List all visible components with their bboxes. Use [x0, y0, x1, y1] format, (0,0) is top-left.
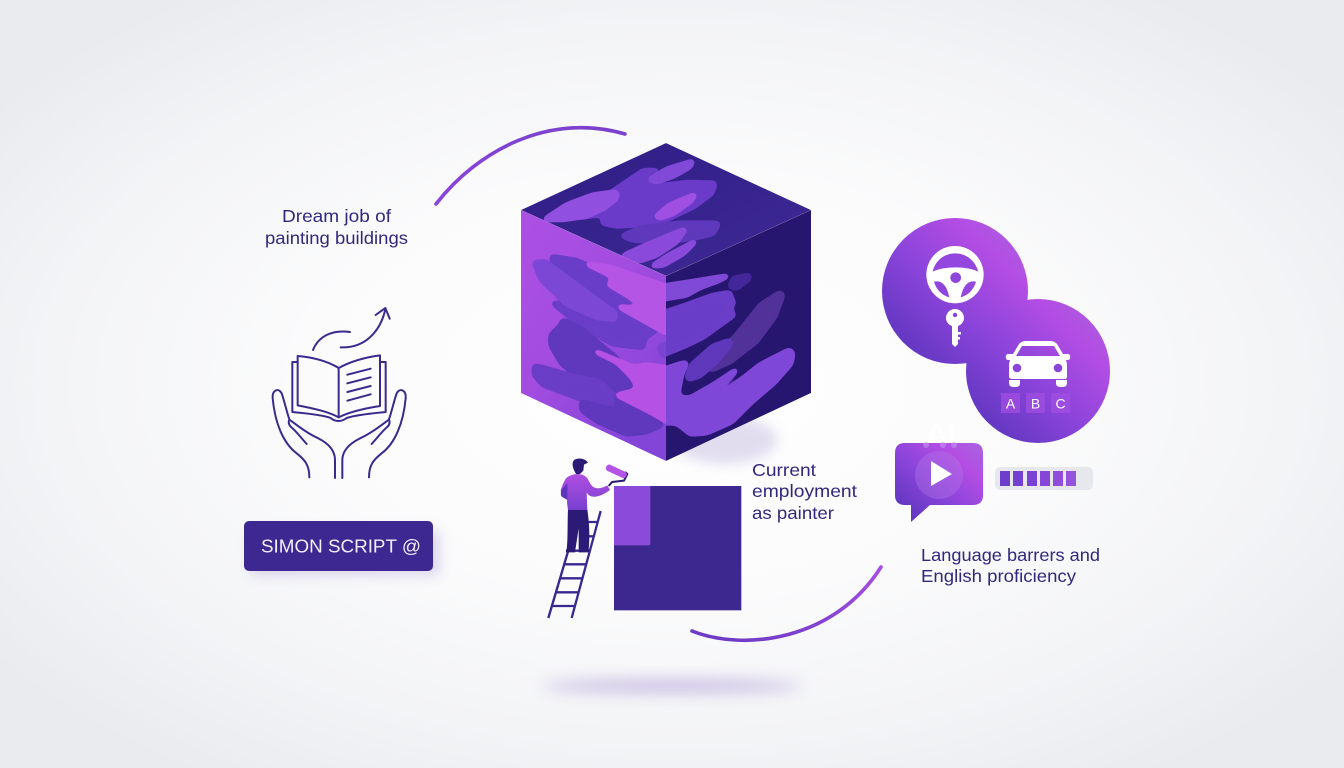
paint roller: [605, 464, 628, 486]
icon: video speech bubble: [895, 418, 983, 522]
text: current employment: as painter: [752, 503, 834, 523]
icon: steering wheel: [926, 246, 984, 303]
painted patch: [614, 486, 650, 545]
heading: dream job: [265, 206, 408, 248]
icon: key: [946, 309, 964, 347]
bottom curved arrow arc: [692, 567, 881, 640]
text: language barriers: English proficiency: [921, 566, 1076, 586]
text: current employment: Current: [752, 460, 816, 480]
icon: left hand: [273, 390, 335, 478]
icon: hands holding book: [273, 308, 406, 478]
icon: open book: [292, 355, 386, 421]
circle 1: steering wheel and key: [882, 218, 1110, 443]
text: language barriers: [921, 545, 1100, 586]
play triangle: [931, 461, 952, 486]
cube left face: [521, 210, 670, 461]
progress bar: [995, 467, 1093, 490]
icon: arrows above book: [313, 308, 390, 350]
ABC letter tiles: A: [1006, 396, 1016, 412]
heading: dream job: painting buildings: [265, 228, 408, 248]
bubble dots: [923, 442, 957, 448]
ABC letter tiles: [1001, 393, 1070, 413]
text: current employment: employment: [752, 481, 857, 501]
text: current employment: [752, 460, 857, 523]
ground shadow: [542, 680, 802, 692]
wall square: [614, 486, 741, 610]
icon: car: [1006, 341, 1070, 387]
bubble body: [895, 443, 983, 522]
play disc: [915, 451, 963, 499]
ABC letter tiles: C: [1055, 396, 1066, 412]
circle 2: car and ABC: [966, 299, 1110, 443]
button: Simon Script: [244, 521, 440, 576]
faint AI label: AI: [926, 418, 956, 451]
cube shadow: [673, 416, 777, 464]
painter illustration: [548, 459, 741, 618]
ladder: [548, 511, 601, 618]
text: language barriers: Language barrers and: [921, 545, 1100, 565]
ABC letter tiles: B: [1031, 396, 1040, 412]
icon: right hand: [342, 390, 406, 478]
top curved arrow arc: [436, 128, 625, 204]
icon: driving circles: [882, 218, 1110, 443]
cube illustration: [521, 143, 811, 461]
painter figure: [561, 459, 628, 552]
heading: dream job: Dream job of: [282, 206, 391, 226]
cube top face: [521, 143, 811, 276]
button: Simon Script: SIMON SCRIPT @: [261, 536, 421, 556]
cube right face: [660, 210, 811, 461]
